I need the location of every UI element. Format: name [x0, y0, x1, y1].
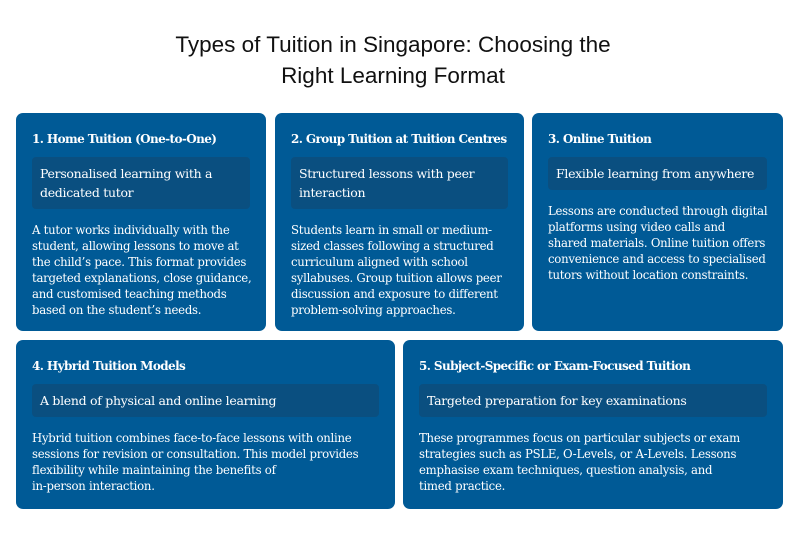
body text — [32, 223, 251, 317]
subtitle box — [291, 157, 508, 209]
body text — [32, 431, 358, 493]
body text: strategies such as PSLE, O-Levels, or A-Levels. Lessons — [419, 447, 736, 461]
body text: based on the student’s needs. — [32, 303, 201, 317]
heading: 4. Hybrid Tuition Models — [32, 359, 185, 373]
body text: student, allowing lessons to move at — [32, 239, 239, 253]
subtitle box: Flexible learning from anywhere — [556, 166, 754, 181]
panel: hybrid — [16, 340, 395, 509]
subtitle box: Personalised learning with a — [40, 166, 212, 181]
body text: discussion and exposure to different — [291, 287, 498, 301]
body text — [291, 223, 502, 317]
panel: online tuition — [532, 113, 783, 331]
title: Types of Tuition in Singapore: Choosing the — [175, 32, 611, 57]
heading: 3. Online Tuition — [548, 132, 651, 146]
panel: group tuition — [275, 113, 524, 331]
subtitle box: Targeted preparation for key examinations — [427, 393, 686, 408]
body text: the child’s pace. This format provides — [32, 255, 246, 269]
body text: problem-solving approaches. — [291, 303, 456, 317]
subtitle box: Structured lessons with peer — [299, 166, 474, 181]
subtitle box: dedicated tutor — [40, 185, 133, 200]
body text: flexibility while maintaining the benefits of — [32, 463, 276, 477]
body text — [548, 204, 768, 282]
body text: timed practice. — [419, 479, 505, 493]
body text: These programmes focus on particular subjects or exam — [419, 431, 740, 445]
body text: curriculum aligned with school — [291, 255, 468, 269]
body text: Lessons are conducted through digital — [548, 204, 767, 218]
subtitle box — [32, 384, 379, 417]
body text — [419, 431, 740, 493]
body text: Hybrid tuition combines face-to-face lessons with online — [32, 431, 351, 445]
body text: in-person interaction. — [32, 479, 155, 493]
body text: and customised teaching methods — [32, 287, 227, 301]
title — [175, 32, 611, 88]
subtitle box — [419, 384, 767, 417]
body text: tutors without location constraints. — [548, 268, 748, 282]
body text: sessions for revision or consultation. This model provides — [32, 447, 358, 461]
title: Right Learning Format — [281, 63, 505, 88]
body text: syllabuses. Group tuition allows peer — [291, 271, 502, 285]
heading: 5. Subject-Specific or Exam-Focused Tuition — [419, 359, 690, 373]
subtitle box — [548, 157, 767, 190]
panel: exam-focused — [403, 340, 783, 509]
body text: shared materials. Online tuition offers — [548, 236, 765, 250]
body text: A tutor works individually with the — [32, 223, 230, 237]
subtitle box — [32, 157, 250, 209]
body text: targeted explanations, close guidance, — [32, 271, 251, 285]
body text: Students learn in small or medium- — [291, 223, 492, 237]
body text: sized classes following a structured — [291, 239, 493, 253]
heading: 1. Home Tuition (One-to-One) — [32, 132, 216, 146]
heading: 2. Group Tuition at Tuition Centres — [291, 132, 506, 146]
panel: home tuition — [16, 113, 266, 331]
body text: platforms using video calls and — [548, 220, 725, 234]
subtitle box: A blend of physical and online learning — [40, 393, 276, 408]
subtitle box: interaction — [299, 185, 365, 200]
body text: convenience and access to specialised — [548, 252, 766, 266]
body text: emphasise exam techniques, question analysis, and — [419, 463, 712, 477]
